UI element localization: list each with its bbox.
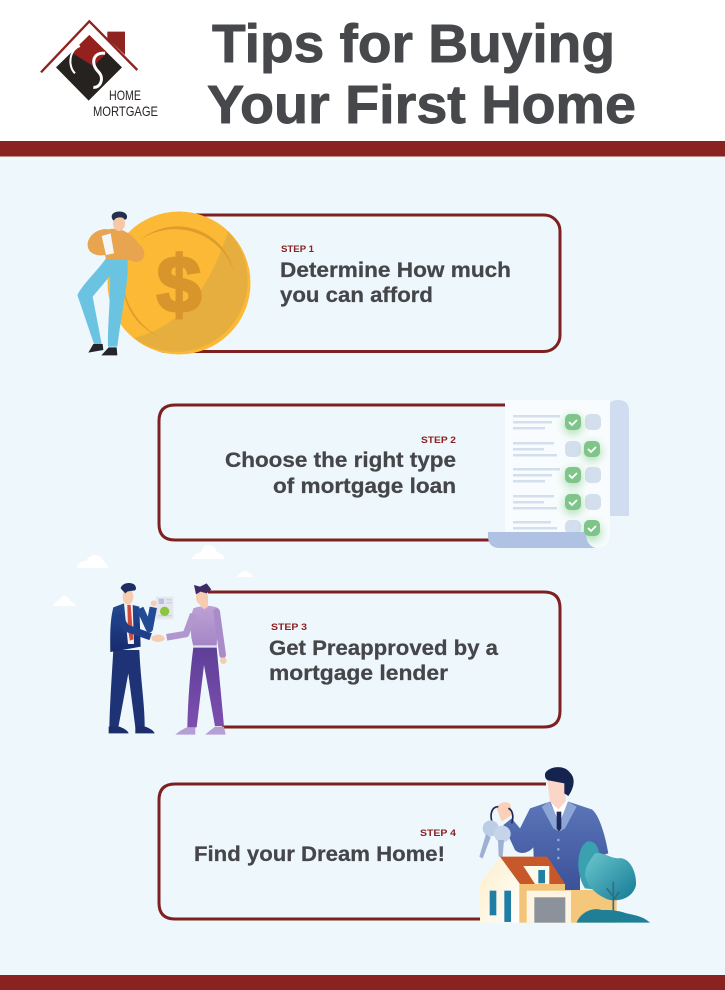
step text bbox=[225, 449, 456, 498]
house bbox=[480, 857, 617, 923]
panel: step 4 bbox=[159, 767, 650, 923]
logo wordmark: home: HOME bbox=[109, 87, 141, 103]
icon: gold coin with dollar sign: $ bbox=[157, 240, 201, 329]
tree bbox=[577, 841, 650, 923]
clouds bbox=[53, 545, 254, 606]
step text: Get Preapproved by a bbox=[269, 637, 498, 660]
step text: mortgage lender bbox=[269, 662, 448, 685]
icon: checklist document bbox=[488, 400, 629, 548]
step text: Choose the right type bbox=[225, 449, 456, 472]
panel: step 1 bbox=[77, 211, 560, 355]
card outline bbox=[150, 215, 560, 352]
panel: step 3 bbox=[53, 545, 560, 735]
panel: step 2 bbox=[159, 400, 629, 548]
man with keys bbox=[479, 767, 608, 893]
approved document bbox=[156, 597, 173, 619]
figure: man leaning on coin bbox=[77, 211, 144, 355]
man in suit bbox=[109, 583, 157, 733]
header band bbox=[0, 0, 725, 141]
step text bbox=[269, 637, 498, 685]
step label: STEP 1 bbox=[281, 244, 315, 255]
step text: of mortgage loan bbox=[273, 475, 456, 498]
figure: man holding keys with house and tree bbox=[479, 767, 650, 923]
logo: CS Home Mortgage bbox=[41, 21, 158, 119]
step text: you can afford bbox=[280, 284, 433, 307]
title bbox=[207, 14, 636, 135]
step text bbox=[280, 259, 511, 307]
footer bar bbox=[0, 975, 725, 990]
title line 2: Your First Home bbox=[207, 75, 636, 135]
step label: STEP 3 bbox=[271, 622, 307, 633]
icon: gold coin with dollar sign bbox=[108, 212, 250, 354]
figure: two men shaking hands bbox=[109, 583, 227, 735]
title line 1: Tips for Buying bbox=[212, 14, 615, 74]
logo wordmark: mortgage: MORTGAGE bbox=[93, 103, 158, 119]
step text: Find your Dream Home! bbox=[194, 843, 445, 866]
man in purple bbox=[151, 583, 227, 735]
logo mark bbox=[41, 21, 137, 101]
card outline bbox=[159, 405, 508, 540]
header divider bar bbox=[0, 141, 725, 156]
card outline bbox=[159, 784, 546, 919]
step label: STEP 2 bbox=[421, 435, 456, 446]
step label: STEP 4 bbox=[420, 828, 457, 839]
card outline bbox=[208, 592, 560, 727]
step text: Determine How much bbox=[280, 259, 511, 282]
